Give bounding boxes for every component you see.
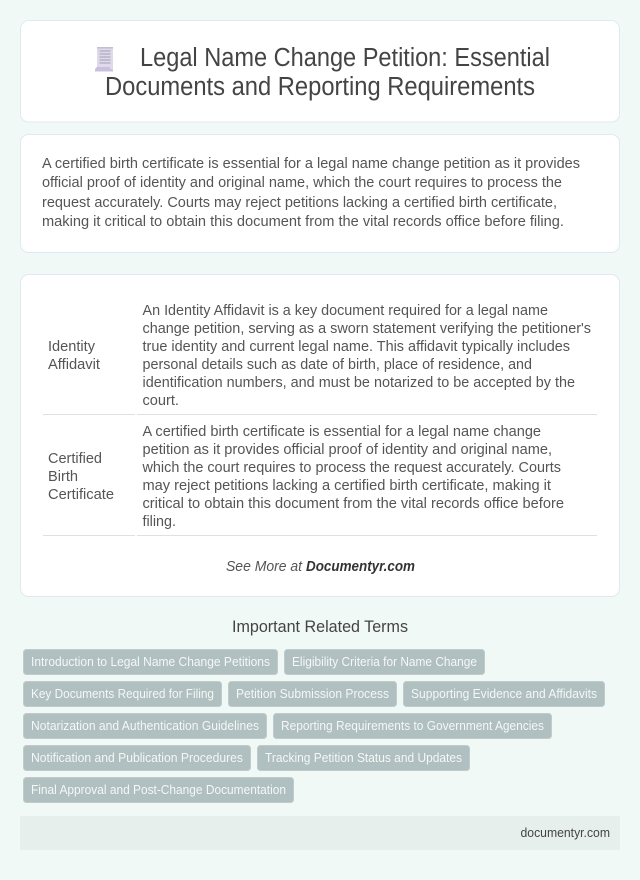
related terms tags bbox=[24, 650, 604, 802]
tag: Eligibility Criteria for Name Change bbox=[292, 655, 477, 669]
row description: A certified birth certificate is essential for a legal name change bbox=[142, 424, 541, 440]
panel: title header bbox=[20, 20, 620, 122]
panel: introduction paragraph bbox=[20, 134, 620, 252]
row description: which the court requires to process the request accurately. Courts bbox=[142, 460, 561, 476]
row description: petition as it provides official proof of identity and original name, bbox=[142, 442, 552, 458]
title text: Documents and Reporting Requirements bbox=[105, 73, 535, 101]
row description: An Identity Affidavit is a key document required for a legal name bbox=[142, 303, 548, 319]
icon: document scroll bbox=[95, 47, 113, 72]
row description: court. bbox=[142, 393, 179, 409]
tag: Tracking Petition Status and Updates bbox=[265, 751, 462, 765]
tag: Reporting Requirements to Government Agencies bbox=[281, 719, 544, 733]
row label: Affidavit bbox=[48, 357, 100, 373]
row description: change petition, serving as a sworn statement verifying the petitioner's bbox=[142, 321, 591, 337]
tag: Introduction to Legal Name Change Petitions bbox=[31, 655, 270, 669]
row label: Identity bbox=[48, 339, 96, 355]
row label: Certificate bbox=[48, 487, 114, 503]
tag: Supporting Evidence and Affidavits bbox=[411, 687, 597, 701]
see more link: See More at bbox=[226, 559, 303, 575]
row description: identification numbers, and must be notarized to be accepted by the bbox=[142, 375, 575, 391]
tag: Final Approval and Post-Change Documentation bbox=[31, 783, 286, 797]
tag: Petition Submission Process bbox=[236, 687, 389, 701]
tag: Key Documents Required for Filing bbox=[31, 687, 214, 701]
paragraph text: request accurately. Courts may reject petitions lacking a certified birth certificate, bbox=[42, 194, 557, 211]
title text: Legal Name Change Petition: Essential bbox=[140, 44, 550, 72]
tag bbox=[284, 650, 484, 674]
footer bar bbox=[20, 816, 620, 850]
row label: Certified bbox=[48, 451, 102, 467]
tag: Notarization and Authentication Guidelines bbox=[31, 719, 259, 733]
tag bbox=[24, 650, 278, 674]
tag bbox=[24, 778, 294, 802]
tag bbox=[258, 746, 470, 770]
tag bbox=[404, 682, 604, 706]
row description: personal details such as date of birth, place of residence, and bbox=[142, 357, 532, 373]
paragraph text: making it critical to obtain this document from the vital records office before filing. bbox=[42, 213, 564, 230]
tag bbox=[274, 714, 552, 738]
tag bbox=[24, 746, 250, 770]
paragraph text: A certified birth certificate is essential for a legal name change petition as it provides bbox=[42, 155, 580, 172]
row description: may reject petitions lacking a certified birth certificate, making it bbox=[142, 478, 551, 494]
see more link: Documentyr.com bbox=[306, 559, 415, 575]
heading: important related terms: Important Related Terms bbox=[232, 617, 408, 636]
table row: Certified Birth Certificate bbox=[43, 424, 597, 536]
tag bbox=[228, 682, 396, 706]
tag bbox=[24, 682, 222, 706]
row description: critical to obtain this document from the vital records office before bbox=[142, 496, 564, 512]
tag: Notification and Publication Procedures bbox=[31, 751, 243, 765]
row label: Birth bbox=[48, 469, 78, 485]
panel: documents table bbox=[20, 274, 620, 596]
paragraph text: official proof of identity and original name, which the court requires to process the bbox=[42, 174, 562, 191]
row description: true identity and current legal name. This affidavit typically includes bbox=[142, 339, 570, 355]
footer text: documentyr.com bbox=[520, 826, 610, 840]
tag bbox=[24, 714, 266, 738]
row description: filing. bbox=[142, 514, 176, 530]
table row: Identity Affidavit bbox=[43, 303, 597, 414]
